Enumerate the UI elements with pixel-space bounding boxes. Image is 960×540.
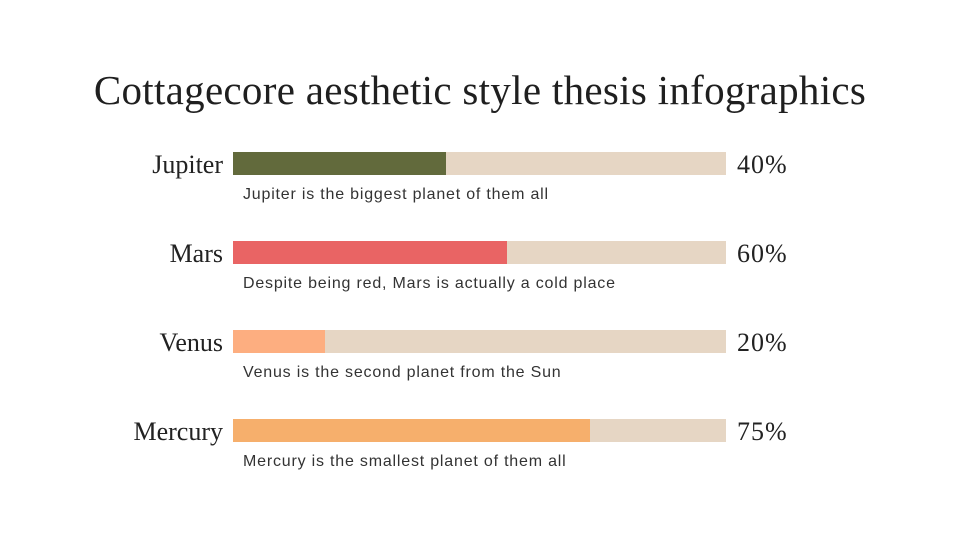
bar: Mercury 75% bbox=[233, 419, 726, 442]
description: Mars: Despite being red, Mars is actually a cold place bbox=[243, 275, 616, 292]
row: Jupiter bbox=[152, 150, 788, 203]
row: Mars bbox=[170, 239, 788, 292]
percent: 75%: 75% bbox=[737, 417, 788, 446]
description: Venus: Venus is the second planet from the Sun bbox=[243, 364, 562, 381]
percent: 40%: 40% bbox=[737, 150, 788, 179]
percent: 60%: 60% bbox=[737, 239, 788, 268]
title: Cottagecore aesthetic style thesis infographics bbox=[94, 67, 866, 113]
description: Jupiter: Jupiter is the biggest planet of them all bbox=[243, 186, 549, 203]
percent: 20%: 20% bbox=[737, 328, 788, 357]
label: Venus: Venus bbox=[159, 328, 223, 357]
label: Mercury: Mercury bbox=[133, 417, 223, 446]
row: Venus bbox=[159, 328, 788, 381]
label: Jupiter: Jupiter bbox=[152, 150, 223, 179]
bar: Mars 60% bbox=[233, 241, 726, 264]
bar: Jupiter 40% bbox=[233, 152, 726, 175]
bar: Venus 20% bbox=[233, 330, 726, 353]
description: Mercury: Mercury is the smallest planet of them all bbox=[243, 453, 566, 470]
row: Mercury bbox=[133, 417, 788, 470]
label: Mars: Mars bbox=[170, 239, 223, 268]
